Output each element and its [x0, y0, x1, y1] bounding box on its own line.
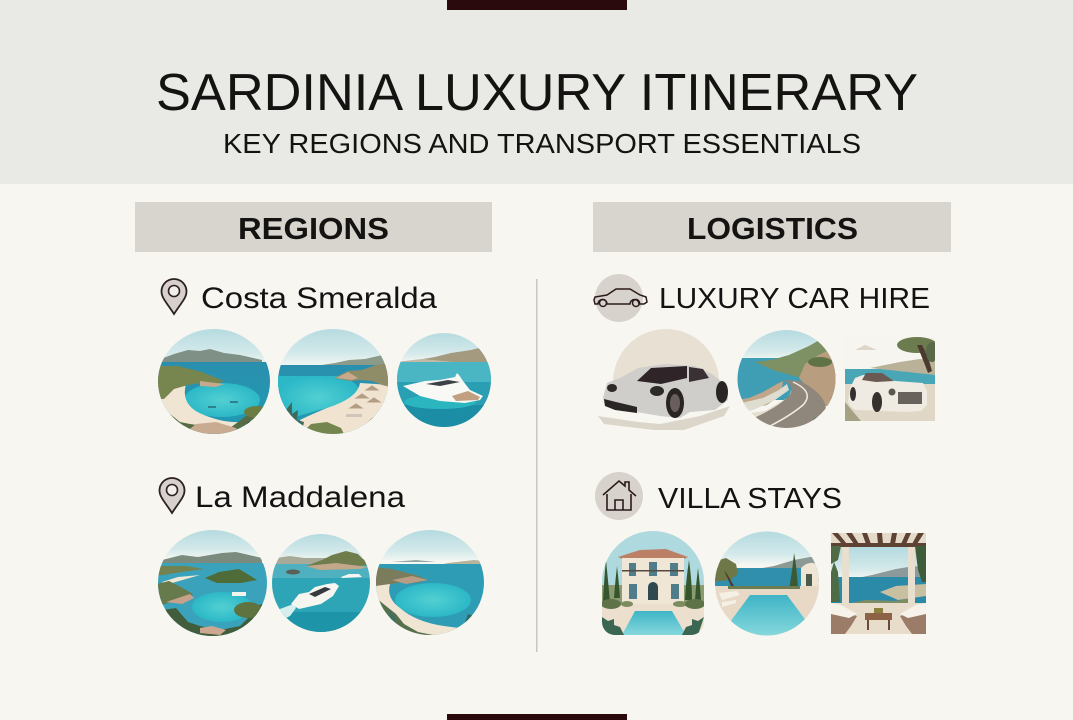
panel heading: logistics: LOGISTICS [687, 211, 858, 246]
icon: map pin [162, 279, 186, 314]
bottom accent bar [447, 714, 627, 720]
panel heading: regions: REGIONS [238, 211, 389, 246]
illustration: island bay [155, 528, 271, 638]
illustration: beach with umbrellas [278, 329, 388, 434]
illustration: yacht at sea [397, 333, 491, 427]
panel heading: regions [135, 202, 492, 252]
heading: Villa Stays: VILLA STAYS [658, 483, 842, 515]
panel: La Maddalena [155, 478, 486, 638]
illustration: silver sports car [598, 329, 730, 430]
top accent bar [447, 0, 627, 10]
heading: La Maddalena: La Maddalena [195, 481, 405, 514]
illustration: bay with beach [158, 329, 270, 434]
illustration: villa with pool [601, 531, 705, 635]
illustration: curved beach [374, 528, 486, 638]
icon: car [594, 274, 647, 322]
panel: Villa Stays [595, 472, 926, 638]
icon: house [595, 472, 643, 520]
heading: Luxury Car Hire: LUXURY CAR HIRE [659, 283, 930, 315]
panel heading: logistics [593, 202, 951, 252]
panel: Luxury Car Hire [594, 274, 938, 432]
heading: Costa Smeralda: Costa Smeralda [201, 282, 437, 315]
icon: map pin [160, 478, 184, 513]
subtitle: KEY REGIONS AND TRANSPORT ESSENTIALS [223, 128, 861, 159]
header band [0, 0, 1073, 184]
title: SARDINIA LUXURY ITINERARY [156, 64, 918, 122]
illustration: yacht among islands [270, 532, 372, 636]
illustration: white convertible [845, 337, 938, 421]
illustration: coastal road [738, 330, 836, 428]
illustration: infinity pool [712, 530, 823, 638]
panel: Costa Smeralda [155, 279, 495, 438]
illustration: pergola terrace [831, 533, 926, 634]
